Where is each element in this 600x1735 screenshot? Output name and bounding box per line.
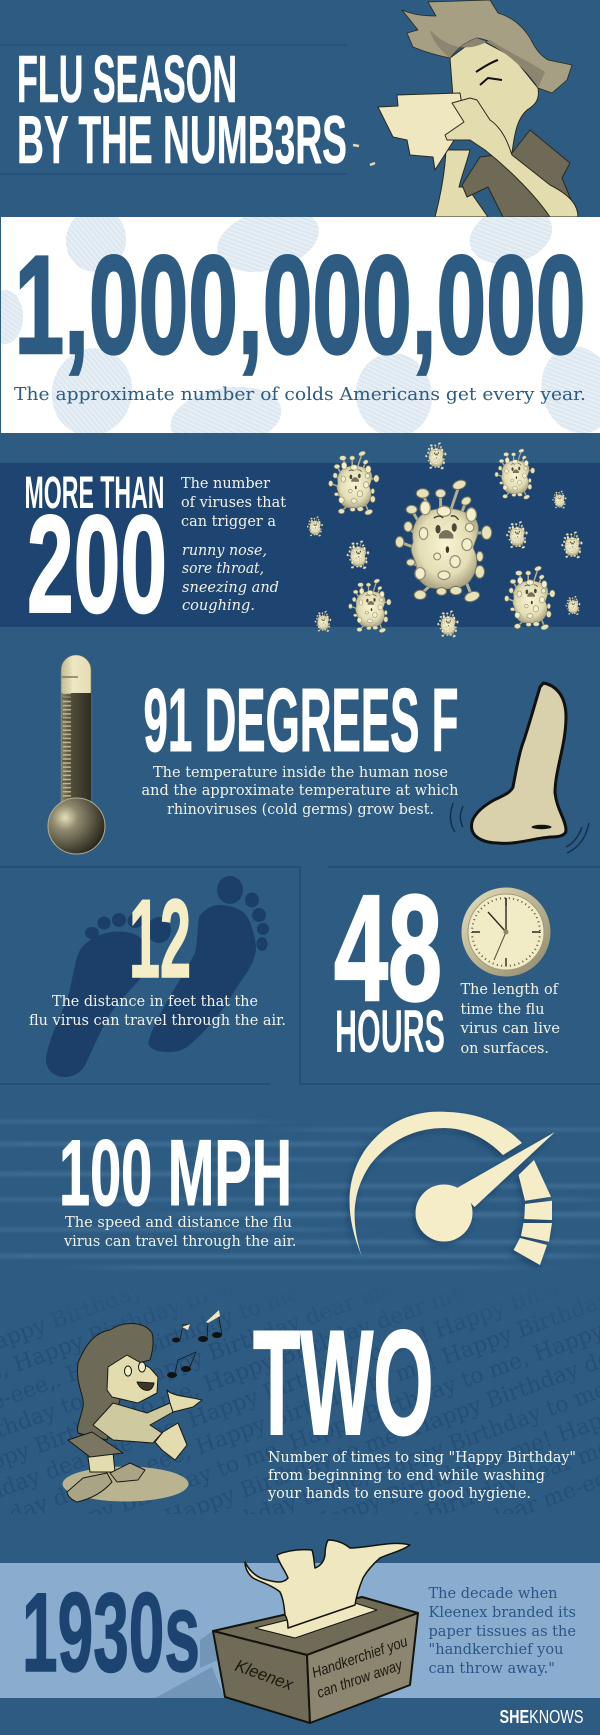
icon: clock <box>462 888 550 976</box>
description: sore throat, <box>182 559 264 577</box>
icon: footprints <box>46 876 269 1077</box>
big number <box>334 863 445 1065</box>
big number: HOURS <box>335 998 445 1065</box>
heading: TWO <box>253 1299 434 1466</box>
description: virus can live <box>460 1019 560 1037</box>
description: from beginning to end while washing <box>268 1466 545 1484</box>
birthday lyrics background <box>0 1317 600 1514</box>
description: The length of <box>460 980 559 998</box>
title <box>0 42 347 178</box>
box label: Handkerchief you can throw away: can throw away <box>315 1656 406 1702</box>
big number: 48 <box>334 863 442 1032</box>
panel: 100 mph <box>0 1112 600 1269</box>
description: "handkerchief you <box>428 1640 564 1658</box>
panel: 1930s <box>0 1540 600 1723</box>
description: The number <box>181 474 271 492</box>
description: can trigger a <box>181 512 276 530</box>
icon: speedometer <box>350 1112 555 1265</box>
description: and the approximate temperature at which <box>142 781 459 799</box>
fingerprint background <box>0 197 600 457</box>
box label: Handkerchief you can throw away <box>310 1633 410 1702</box>
description: flu virus can travel through the air. <box>29 1011 286 1029</box>
panel: 12 feet <box>29 876 286 1077</box>
description: on surfaces. <box>460 1039 549 1057</box>
description: The decade when <box>428 1584 558 1602</box>
heading: MORE THAN <box>24 467 164 518</box>
description: coughing. <box>182 596 255 614</box>
big number 12: 12 <box>129 877 191 1001</box>
description: Kleenex branded its <box>428 1603 576 1621</box>
description <box>267 1448 576 1502</box>
description: of viruses that <box>181 493 286 511</box>
description: your hands to ensure good hygiene. <box>267 1484 531 1502</box>
description: paper tissues as the <box>428 1622 576 1640</box>
panel: two <box>0 1310 600 1514</box>
description: virus can travel through the air. <box>63 1232 296 1250</box>
description: rhinoviruses (cold germs) grow best. <box>167 800 434 818</box>
heading: 200 <box>27 487 167 642</box>
heading: 100 MPH <box>59 1120 292 1225</box>
icon: viruses <box>307 442 583 638</box>
description: The speed and distance the flu <box>65 1213 292 1231</box>
illustration: person sneezing into tissue <box>353 0 578 217</box>
description: The distance in feet that the <box>52 992 258 1010</box>
description <box>63 1213 296 1250</box>
description <box>29 992 286 1029</box>
logo: SheKnows: SHEKNOWS <box>500 1707 584 1727</box>
box shadow <box>155 1630 225 1698</box>
panel: 48 hours <box>334 863 560 1065</box>
box label: Kleenex: Kleenex <box>233 1656 296 1694</box>
description: The temperature inside the human nose <box>153 763 448 781</box>
header <box>0 0 578 217</box>
icon: nose <box>451 683 589 853</box>
section dividers <box>0 867 600 1084</box>
illustration: singing girl <box>62 1310 222 1502</box>
panel: one billion colds <box>1 217 600 433</box>
panel: 91 degrees F <box>48 655 589 854</box>
heading <box>24 467 167 642</box>
caption: The approximate number of colds Americans get every year. <box>14 384 586 405</box>
description <box>460 980 560 1057</box>
heading: 1930s <box>22 1570 200 1695</box>
description <box>428 1584 576 1677</box>
icon: tissue box <box>213 1540 418 1723</box>
motion streak background <box>0 1120 600 1269</box>
description: runny nose, <box>182 541 267 559</box>
description: sneezing and <box>182 578 279 596</box>
description: time the flu <box>460 1000 545 1018</box>
box label: Handkerchief you can throw away: Handkerchief you <box>310 1633 410 1682</box>
panel: more than 200 viruses <box>0 442 600 642</box>
icon: thermometer <box>48 655 105 854</box>
title: FLU SEASON <box>17 42 237 117</box>
description <box>181 474 286 614</box>
description <box>142 763 459 818</box>
description: can throw away." <box>428 1659 555 1677</box>
description: Number of times to sing "Happy Birthday" <box>268 1448 576 1466</box>
